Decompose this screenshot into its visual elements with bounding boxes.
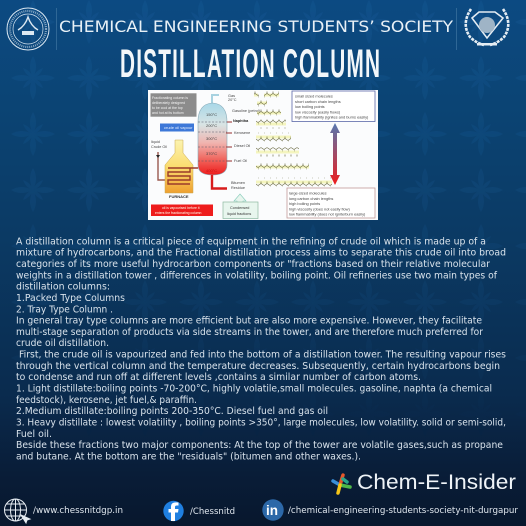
body text: mixture of hydrocarbons, and the Fractional distillation process aims to separate this crude oil into broad <box>16 248 506 259</box>
product labels and pipes: Bitumen <box>231 181 245 185</box>
callout: large molecules: long carbon chain lengths <box>289 196 333 201</box>
callout: large molecules: low flammability (does not ignite/burn easily) <box>289 212 366 217</box>
product labels and pipes: Kerosene <box>234 131 250 135</box>
facebook link: /Chessnitd <box>190 507 235 517</box>
molecule chains <box>254 90 332 186</box>
fractionating column: 150°C <box>206 112 217 117</box>
liquid crude oil inlet <box>151 140 190 180</box>
body text: In general tray type columns are more efficient but are also more expensive. However, they facilitate <box>16 316 482 327</box>
callout: small molecules: short carbon chain lengths <box>295 99 341 104</box>
linkedin link: /chemical-engineering-students-society-nit-durgapur <box>288 506 518 516</box>
logo: left society seal <box>7 8 49 50</box>
product labels and pipes: Naphtha <box>233 119 249 123</box>
body text: 1.Packed Type Columns <box>16 293 125 304</box>
furnace: FURNACE <box>169 194 189 199</box>
fractionating column <box>198 95 227 175</box>
product labels and pipes: Residue <box>231 186 245 190</box>
label: condensed liquid fractions: liquid fractions <box>227 212 251 216</box>
panel: distillation diagram <box>148 90 378 220</box>
icon: linkedin <box>262 499 284 521</box>
fractionating column: 400°C <box>206 168 217 173</box>
note: grey box: to be cool at the top <box>152 106 183 110</box>
fractionating column: 370°C <box>206 151 217 156</box>
body text: and butane. At the bottom are the "residuals" (bitumen and other waxes.). <box>16 452 361 462</box>
body text: multi-stage separation of products via side streams in the tower, and are therefore much preferred for <box>16 327 483 338</box>
product labels and pipes: Gasoline (petrol) <box>232 109 261 113</box>
body text: to condense and run off at different levels ,contains a similar number of carbon atoms. <box>16 372 421 383</box>
callout: large molecules: high boiling points <box>289 201 320 206</box>
body text: weights in a distillation tower , differences in volatility, boiling point. Oil refineries use two main types of <box>16 270 498 281</box>
label: crude oil vapour <box>160 124 194 132</box>
body text: 1. Light distillate:boiling points -70-200°C, highly volatile,small molecules. gasoline, naphta (a chemical <box>16 384 492 394</box>
note: red box: oil is vapourised before it <box>162 206 200 210</box>
icon: Chem-E-Insider molecule logo <box>333 475 350 493</box>
body text: categories of its more useful hydrocarbon components or "fractions based on their relative molecular <box>16 259 490 270</box>
product labels and pipes: Diesel Oil <box>234 144 250 148</box>
callout: small molecules: high flammability (ignites and burns easily) <box>295 115 369 120</box>
body text: feedstock), kerosene, jet fuel,& paraffin. <box>16 395 197 406</box>
note: grey box: and hot at its bottom <box>152 111 184 115</box>
molecule highlights <box>254 95 332 182</box>
body text: through the vertical column and the temperature decreases. Subsequently, certain hydrocarbons begin <box>16 361 500 372</box>
product labels and pipes: 20°C <box>228 98 237 102</box>
body text: 2. Tray Type Column . <box>16 304 113 315</box>
body text <box>16 236 506 462</box>
callout: small molecules: low boiling points <box>295 104 325 109</box>
website link: /www.chessnitdgp.in <box>33 506 123 516</box>
body text: A distillation column is a critical piece of equipment in the refining of crude oil which is made up of a <box>16 236 486 247</box>
callout: small molecules: low viscosity (easily flows) <box>295 109 341 114</box>
fractionating column: 200°C <box>206 123 217 128</box>
logo: right wreath emblem <box>466 9 508 46</box>
label: condensed liquid fractions <box>223 194 258 218</box>
note: red box: enters the fractionating column <box>155 211 201 215</box>
liquid crude oil inlet: Crude Oil <box>151 145 167 149</box>
icon: globe <box>4 499 30 523</box>
note: grey box <box>150 93 196 117</box>
title: DISTILLATION COLUMN <box>120 41 380 86</box>
callout: small molecules: small sized molecules <box>295 94 333 98</box>
society name heading: CHEMICAL ENGINEERING STUDENTS’ SOCIETY <box>59 17 453 36</box>
liquid crude oil inlet: liquid <box>151 140 160 144</box>
product labels and pipes: Fuel Oil <box>234 159 247 163</box>
label: crude oil vapour: crude oil vapour <box>164 125 193 130</box>
divider right <box>456 8 457 50</box>
body text: Beside these fractions two major components: At the top of the tower are volatile gases,such as propane <box>16 440 503 451</box>
callout: large molecules <box>287 188 375 218</box>
body text: Fuel oil. <box>16 429 52 440</box>
product labels and pipes <box>226 94 261 190</box>
note: grey box: Fractionating column is <box>152 96 188 100</box>
fractionating column: 300°C <box>206 136 217 141</box>
body text: crude oil distillation. <box>16 338 109 349</box>
note: grey box: deliberately designed <box>152 101 185 105</box>
body text: First, the crude oil is vapourized and fed into the bottom of a distillation tower. The resulting vapour rises <box>19 350 506 361</box>
body text: 3. Heavy distillate : lowest volatility , boiling points >350°, large molecules, low volatility. solid or semi-solid, <box>16 418 506 428</box>
callout: large molecules: large-sized molecules <box>289 190 327 196</box>
body text: 2.Medium distillate:boiling points 200-350°C. Diesel fuel and gas oil <box>16 406 328 417</box>
icon: linkedin: in <box>266 503 278 518</box>
product labels and pipes: Gas <box>228 94 235 98</box>
brand name: Chem-E-Insider <box>357 471 516 494</box>
body text: distillation columns: <box>16 282 110 293</box>
note: red box <box>151 204 213 216</box>
icon: facebook <box>163 501 184 521</box>
callout: large molecules: high viscosity (does not easily flow) <box>289 206 350 211</box>
furnace <box>165 140 198 199</box>
arrow: double headed gradient <box>330 123 340 185</box>
bottom residue pipe <box>212 175 227 188</box>
callout: small molecules <box>292 91 375 122</box>
divider left <box>56 8 57 50</box>
label: condensed liquid fractions: Condensed <box>230 206 249 210</box>
